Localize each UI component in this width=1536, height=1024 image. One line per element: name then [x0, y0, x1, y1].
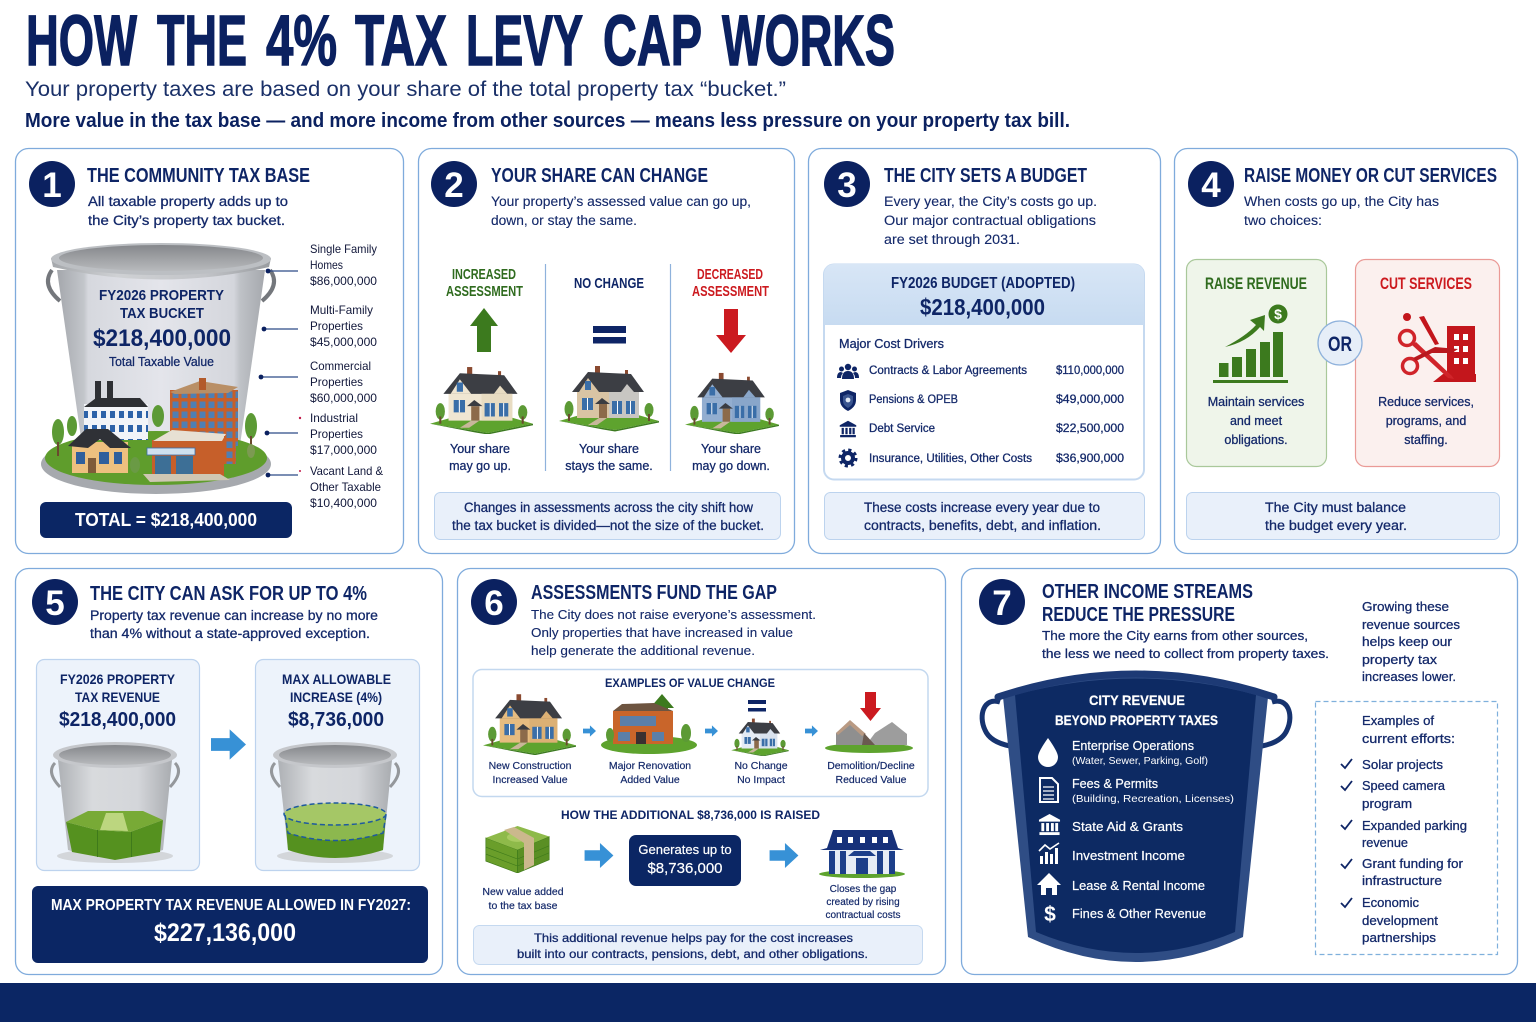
description: Every year, the City’s costs go up. — [884, 194, 1097, 209]
icon: renovation with up arrow — [601, 694, 697, 754]
result bar — [32, 886, 428, 963]
side note: Growing these — [1362, 600, 1449, 614]
arrow to generated revenue — [585, 843, 613, 868]
caption: programs, and — [1386, 414, 1466, 428]
card: max allowable increase — [256, 660, 420, 870]
example captions — [489, 760, 915, 786]
title: HOW — [26, 2, 137, 81]
dashed box: examples of current efforts — [1316, 702, 1498, 954]
revenue item: lease and rental income: Lease & Rental Income — [1072, 879, 1205, 893]
example captions: New Construction — [489, 760, 572, 772]
revenue item: state aid and grants: State Aid & Grants — [1072, 820, 1183, 834]
icon: new construction house — [483, 694, 576, 755]
icon: house — [559, 366, 659, 432]
side note: property tax — [1362, 653, 1438, 667]
revenue item: fees and permits — [1040, 777, 1234, 805]
card: FY2026 revenue bucket: $218,400,000 — [59, 709, 176, 731]
step number 1 — [29, 161, 75, 207]
title: TAX — [355, 2, 447, 81]
heading: ASSESSMENTS FUND THE GAP — [531, 582, 777, 604]
list of efforts: revenue — [1362, 836, 1408, 850]
step number 1: 1 — [42, 166, 62, 205]
example captions: Increased Value — [492, 774, 568, 786]
caption — [1208, 395, 1304, 447]
panel 5: the city can ask for up to 4% — [16, 568, 442, 974]
bucket label: Total Taxable Value — [109, 355, 214, 369]
bucket label — [93, 287, 231, 369]
list of efforts: Expanded parking — [1362, 819, 1467, 833]
navy revenue bucket — [982, 674, 1290, 962]
illustration: city properties on a green platform — [41, 378, 271, 494]
revenue item: investment income — [1039, 843, 1185, 864]
category callouts: assessed value by property type: Properties — [310, 375, 363, 389]
heading: THE CITY CAN ASK FOR UP TO 4% — [90, 583, 367, 605]
caption: Your share — [701, 442, 761, 456]
category callouts: assessed value by property type: $17,000,000 — [310, 443, 377, 457]
major cost drivers list: Contracts & Labor Agreements — [869, 365, 1027, 377]
category callouts: assessed value by property type: Multi-Family — [310, 303, 373, 317]
caption: stays the same. — [565, 459, 653, 473]
OR badge: OR — [1328, 333, 1352, 356]
card: cut services — [1356, 260, 1500, 466]
subtitle: Your property taxes are based on your share of the total property tax “bucket.” — [25, 78, 786, 101]
description — [90, 608, 378, 641]
panel 3: the city sets a budget — [808, 148, 1160, 554]
caption: closes the gap: created by rising — [826, 897, 900, 908]
icon: green up arrow — [470, 308, 498, 352]
revenue item: lease and rental income — [1037, 873, 1205, 895]
examples of value change box — [473, 670, 928, 796]
card: cut services: CUT SERVICES — [1380, 274, 1472, 293]
icon: metal bucket with dashed 4% fill level — [271, 742, 399, 863]
card: raise revenue — [1186, 260, 1326, 466]
side note: revenue sources — [1362, 618, 1460, 632]
revenue item: fines and other revenue: Fines & Other Revenue — [1072, 907, 1206, 921]
bucket label: FY2026 PROPERTY — [99, 287, 224, 304]
step number 3: 3 — [837, 166, 857, 205]
bucket label: $218,400,000 — [93, 325, 231, 352]
list of efforts: development — [1362, 914, 1439, 928]
category callouts: assessed value by property type: Commercial — [310, 359, 371, 373]
icon: gear — [840, 450, 856, 466]
title: THE — [157, 2, 247, 81]
category callouts: assessed value by property type: $10,400,000 — [310, 496, 377, 510]
illustration: large metal tax bucket — [48, 243, 274, 445]
caption: new value: New value added — [482, 886, 564, 898]
icon: bank — [840, 421, 856, 437]
result bar: MAX PROPERTY TAX REVENUE ALLOWED IN FY2027: — [51, 897, 411, 914]
example captions: No Change — [734, 760, 788, 772]
list of efforts: infrastructure — [1362, 874, 1442, 888]
caption — [1378, 395, 1474, 447]
step number 7: 7 — [992, 584, 1012, 623]
footer bar — [0, 983, 1536, 1022]
step number 4: 4 — [1201, 166, 1221, 205]
subheading: how revenue is raised: HOW THE ADDITIONAL $8,736,000 IS RAISED — [561, 808, 820, 822]
panel 1: the community tax base — [16, 148, 404, 554]
callout: generates up to: Generates up to — [638, 842, 732, 857]
description — [491, 194, 751, 228]
description: than 4% without a state-approved exception. — [90, 626, 370, 641]
description: The City does not raise everyone’s assessment. — [531, 607, 816, 622]
description: Our major contractual obligations — [884, 213, 1096, 228]
column: decreased assessment: DECREASED — [697, 266, 763, 283]
major cost drivers list — [837, 337, 1124, 466]
caption: new value — [482, 886, 564, 912]
heading: THE CITY SETS A BUDGET — [884, 165, 1087, 187]
caption: and meet — [1230, 414, 1283, 428]
icon: growth chart with dollar coin: $ — [1274, 306, 1282, 322]
category callouts: assessed value by property type: $86,000,000 — [310, 274, 377, 288]
note box: contracts, benefits, debt, and inflation. — [864, 518, 1101, 533]
caption — [692, 442, 770, 473]
icon: scissors cutting building — [1400, 313, 1476, 382]
check marks — [1341, 759, 1352, 907]
note box — [434, 492, 780, 540]
budget card — [824, 264, 1144, 480]
icon: metal bucket with money — [51, 742, 179, 863]
caption — [449, 442, 511, 473]
step number 5 — [32, 579, 78, 625]
revenue item: enterprise operations: Enterprise Operations — [1072, 739, 1194, 753]
category callouts: assessed value by property type: Properties — [310, 319, 363, 333]
icon: growth chart with dollar coin — [1213, 304, 1288, 383]
category callouts: assessed value by property type: Industrial — [310, 411, 358, 425]
caption: staffing. — [1404, 433, 1448, 447]
callout: generates up to: $8,736,000 — [647, 860, 723, 877]
list of efforts: Solar projects — [1362, 758, 1443, 772]
icon: equals sign — [593, 326, 626, 344]
list of efforts: partnerships — [1362, 931, 1436, 945]
category callouts: assessed value by property type: Other Taxable — [310, 480, 381, 494]
list of efforts — [1362, 758, 1467, 945]
card: raise revenue: RAISE REVENUE — [1205, 274, 1307, 293]
column: no change — [559, 275, 659, 473]
list of efforts: Speed camera — [1362, 779, 1445, 793]
note box: built into our contracts, pensions, debt, and other obligations. — [517, 947, 868, 961]
category callouts: assessed value by property type: Properties — [310, 427, 363, 441]
side note — [1362, 600, 1460, 684]
panel 6: assessments fund the gap — [458, 568, 946, 974]
key message: More value in the tax base — and more income from other sources — means less pressure on your property tax bill. — [25, 110, 1070, 132]
category callouts: assessed value by property type — [259, 242, 383, 510]
bucket heading — [1055, 692, 1218, 728]
step number 2: 2 — [444, 166, 464, 205]
description — [1244, 194, 1439, 228]
dashed box: examples of current efforts: Examples of — [1362, 714, 1435, 728]
description — [531, 607, 816, 658]
panel 2: your share can change — [418, 148, 794, 554]
note box: Changes in assessments across the city shift how — [464, 500, 753, 515]
caption — [565, 442, 653, 473]
note box: the tax bucket is divided—not the size of the bucket. — [452, 518, 764, 533]
example captions: No Impact — [737, 774, 785, 786]
column: no change: NO CHANGE — [574, 275, 644, 292]
note box: the budget every year. — [1265, 518, 1407, 533]
card: FY2026 revenue bucket: FY2026 PROPERTY — [60, 671, 176, 687]
heading: REDUCE THE PRESSURE — [1042, 604, 1235, 626]
card: max allowable increase: $8,736,000 — [288, 709, 384, 731]
card: max allowable increase: INCREASE (4%) — [290, 689, 382, 705]
description: Your property’s assessed value can go up, — [491, 194, 751, 209]
arrow to city hall — [770, 843, 798, 868]
icon: no change equals and house — [731, 700, 789, 756]
category callouts: assessed value by property type: $60,000,000 — [310, 391, 377, 405]
note box: These costs increase every year due to — [864, 500, 1100, 515]
column: decreased assessment: ASSESSMENT — [692, 283, 769, 300]
description: the City’s property tax bucket. — [88, 213, 285, 228]
total bar: TOTAL = $218,400,000 — [75, 510, 257, 530]
callout: generates up to — [629, 835, 741, 886]
revenue item: enterprise operations: (Water, Sewer, Parking, Golf) — [1072, 755, 1208, 767]
caption: Reduce services, — [1378, 395, 1474, 409]
bucket heading: BEYOND PROPERTY TAXES — [1055, 712, 1218, 728]
column: decreased assessment — [685, 266, 779, 473]
icon: shield — [840, 390, 856, 411]
major cost drivers list: $49,000,000 — [1056, 394, 1124, 406]
caption: closes the gap: contractual costs — [825, 910, 901, 921]
examples of value change box: EXAMPLES OF VALUE CHANGE — [605, 676, 775, 690]
title — [26, 2, 895, 81]
revenue item: fines and other revenue — [1044, 903, 1206, 926]
description: the less we need to collect from property taxes. — [1042, 646, 1329, 661]
icon: city hall — [819, 830, 905, 878]
icon: stack of cash — [486, 826, 549, 873]
heading — [1042, 581, 1253, 626]
category callouts: assessed value by property type: $45,000,000 — [310, 335, 377, 349]
note box: This additional revenue helps pay for the cost increases — [534, 931, 853, 945]
icon: red down arrow — [716, 309, 746, 353]
side note: helps keep our — [1362, 635, 1452, 649]
caption: closes the gap — [825, 884, 901, 921]
major cost drivers list: $36,900,000 — [1056, 453, 1124, 465]
caption: Your share — [579, 442, 639, 456]
description: Property tax revenue can increase by no more — [90, 608, 378, 623]
result bar: $227,136,000 — [154, 919, 296, 947]
bucket label: TAX BUCKET — [120, 305, 204, 322]
major cost drivers list: Major Cost Drivers — [839, 337, 944, 351]
revenue item: enterprise operations — [1038, 738, 1208, 767]
category callouts: assessed value by property type: Single Family — [310, 242, 377, 256]
category callouts: assessed value by property type: Vacant Land & — [310, 464, 383, 478]
description: are set through 2031. — [884, 232, 1020, 247]
step number 2 — [431, 161, 477, 207]
card: max allowable increase: MAX ALLOWABLE — [282, 671, 391, 687]
OR badge — [1318, 321, 1362, 365]
revenue item: fines and other revenue: $ — [1044, 903, 1056, 926]
list of efforts: Grant funding for — [1362, 857, 1463, 871]
list of efforts: Economic — [1362, 896, 1419, 910]
caption: Your share — [450, 442, 510, 456]
bucket heading: CITY REVENUE — [1089, 692, 1185, 708]
list of efforts: program — [1362, 797, 1412, 811]
revenue item: investment income: Investment Income — [1072, 849, 1185, 863]
major cost drivers list: Insurance, Utilities, Other Costs — [869, 453, 1032, 465]
card: FY2026 revenue bucket — [36, 660, 200, 870]
step number 4 — [1188, 161, 1234, 207]
arrow between cards — [211, 729, 246, 760]
dashed box: examples of current efforts: current efforts: — [1362, 732, 1455, 746]
example captions: Added Value — [620, 774, 680, 786]
step number 6 — [471, 579, 517, 625]
major cost drivers list: Debt Service — [869, 423, 935, 435]
step number 7 — [979, 579, 1025, 625]
description: help generate the additional revenue. — [531, 643, 755, 658]
heading: OTHER INCOME STREAMS — [1042, 581, 1253, 603]
description — [1042, 628, 1329, 661]
description: When costs go up, the City has — [1244, 194, 1439, 209]
description: Only properties that have increased in value — [531, 625, 793, 640]
description: two choices: — [1244, 213, 1322, 228]
heading: YOUR SHARE CAN CHANGE — [491, 165, 708, 187]
revenue item: fees and permits: (Building, Recreation, Licenses) — [1072, 793, 1234, 805]
caption: obligations. — [1224, 433, 1288, 447]
example captions: Demolition/Decline — [827, 760, 915, 772]
caption: new value: to the tax base — [489, 900, 558, 912]
caption: closes the gap: Closes the gap — [830, 884, 897, 895]
panel 7: other income streams — [962, 568, 1518, 974]
major cost drivers list: Pensions & OPEB — [869, 394, 958, 406]
budget card header: FY2026 BUDGET (ADOPTED) — [891, 275, 1075, 292]
note box — [824, 492, 1144, 540]
major cost drivers list: $22,500,000 — [1056, 423, 1124, 435]
icon: house — [430, 367, 533, 435]
heading: THE COMMUNITY TAX BASE — [87, 165, 310, 187]
total bar — [40, 502, 292, 538]
card: FY2026 revenue bucket: TAX REVENUE — [75, 689, 160, 705]
revenue item: fees and permits: Fees & Permits — [1072, 777, 1158, 791]
step number 5: 5 — [45, 584, 65, 623]
budget card header — [824, 264, 1144, 325]
title: LEVY — [466, 2, 583, 81]
caption: Maintain services — [1208, 395, 1304, 409]
description — [884, 194, 1097, 247]
note box — [1186, 492, 1500, 540]
icon: house — [685, 373, 779, 434]
title: WORKS — [722, 2, 895, 81]
step number 6: 6 — [484, 584, 504, 623]
small flow arrows — [583, 725, 818, 737]
title: 4% — [266, 2, 337, 81]
icon: people — [837, 364, 859, 379]
column: increased assessment: INCREASED — [452, 266, 516, 283]
description: All taxable property adds up to — [88, 194, 288, 209]
panel 4: raise money or cut services — [1174, 148, 1518, 554]
column: increased assessment: ASSESSMENT — [446, 283, 523, 300]
note box — [474, 926, 922, 964]
note box: The City must balance — [1265, 500, 1406, 515]
caption: may go down. — [692, 459, 770, 473]
column: increased assessment — [430, 266, 533, 473]
title: CAP — [603, 2, 702, 81]
icon: demolition with down arrow — [825, 692, 913, 753]
major cost drivers list: $110,000,000 — [1056, 365, 1124, 377]
category callouts: assessed value by property type: Homes — [310, 258, 343, 272]
description — [88, 194, 288, 228]
side note: increases lower. — [1362, 670, 1456, 684]
budget card header: $218,400,000 — [920, 294, 1045, 320]
description: The more the City earns from other sources, — [1042, 628, 1308, 643]
description: down, or stay the same. — [491, 213, 637, 228]
step number 3 — [824, 161, 870, 207]
example captions: Reduced Value — [835, 774, 907, 786]
example captions: Major Renovation — [609, 760, 691, 772]
revenue item: state aid and grants — [1039, 814, 1183, 835]
caption: may go up. — [449, 459, 511, 473]
